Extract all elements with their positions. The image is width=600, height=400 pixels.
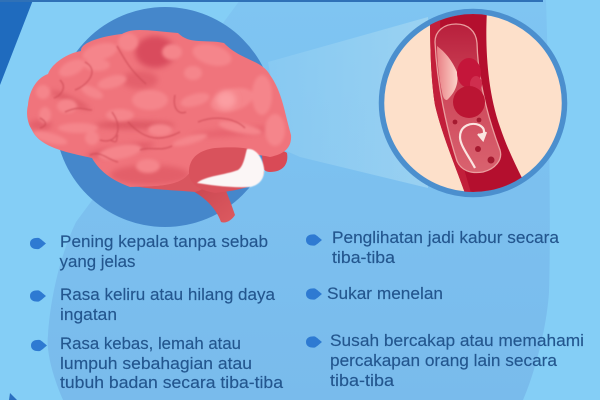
lens background (382, 12, 564, 194)
symptom: speech: percakapan orang lain secara (330, 351, 558, 370)
symptom: swallowing: Sukar menelan (327, 284, 443, 303)
brain illustration (27, 30, 291, 223)
symptom: numbness: lumpuh sebahagian atau (60, 354, 252, 373)
symptom: headache: Pening kepala tanpa sebab (60, 232, 268, 251)
symptom: speech: tiba-tiba (330, 371, 395, 390)
blood clot (453, 58, 485, 118)
blue circle behind brain (55, 7, 275, 227)
symptom: headache: yang jelas (60, 252, 136, 271)
symptom: headache (30, 232, 268, 271)
corner mark (9, 393, 17, 400)
symptom: speech (306, 331, 584, 390)
symptom: numbness (31, 334, 284, 392)
symptom: confusion: ingatan (60, 305, 117, 324)
symptom: blurred vision: Penglihatan jadi kabur secara (332, 228, 560, 247)
flow arrow (460, 124, 486, 168)
top bar (0, 0, 543, 2)
symptom: blurred vision: tiba-tiba (332, 248, 396, 267)
rear red lobe (262, 151, 287, 172)
blood vessel (430, 10, 523, 196)
zoom beam (268, 17, 428, 188)
cerebellum (130, 163, 208, 192)
cerebrum base (27, 30, 291, 187)
symptom: speech: Susah bercakap atau memahami (330, 331, 584, 350)
symptoms list: left column (30, 232, 284, 392)
pale highlight (216, 91, 236, 109)
brain stem (187, 180, 235, 223)
symptom: confusion (30, 285, 276, 324)
debris dots (453, 118, 494, 164)
cerebrum (27, 30, 291, 187)
magnified artery circle (382, 10, 564, 196)
symptom: numbness: tubuh badan secara tiba-tiba (60, 373, 284, 392)
symptom: numbness: Rasa kebas, lemah atau (60, 334, 241, 353)
symptoms list: right column (306, 228, 584, 390)
arterial plaque (437, 46, 458, 100)
temporal lobe (189, 147, 264, 193)
symptom: blurred vision (306, 228, 560, 267)
brain folds (28, 33, 285, 185)
corner accent (0, 0, 33, 85)
white curved highlight (197, 149, 264, 187)
inner vessel capsule (435, 24, 501, 173)
symptom: confusion: Rasa keliru atau hilang daya (60, 285, 276, 304)
vessel dark edge (430, 10, 472, 196)
